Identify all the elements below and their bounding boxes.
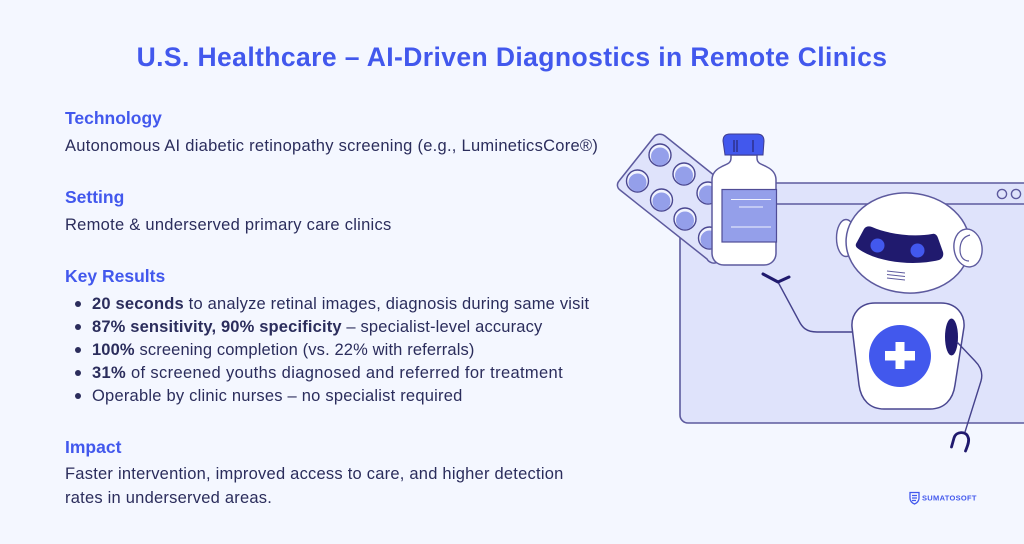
- list item 1: 20 seconds to analyze retinal images, diagnosis during same visit: [92, 295, 589, 313]
- robot left arm: [763, 274, 852, 332]
- right ear: [951, 227, 985, 269]
- list item 3: 100% screening completion (vs. 22% with referrals): [92, 341, 475, 359]
- left ear: [836, 220, 856, 256]
- list: key results: [75, 295, 589, 405]
- section heading: Key Results: Key Results: [65, 266, 165, 286]
- logo: Sumatosoft: SUMATOSOFT: [922, 494, 977, 502]
- robot body: [852, 303, 964, 409]
- text: technology description: Autonomous AI diabetic retinopathy screening (e.g., LumineticsCore®): [65, 137, 598, 155]
- logo: Sumatosoft: [910, 492, 977, 504]
- text: impact description: Faster intervention, improved access to care, and higher detection: [65, 465, 564, 483]
- text: setting description: Remote & underserved primary care clinics: [65, 216, 392, 234]
- icon: blister pack: [617, 134, 740, 263]
- section heading: Impact: Impact: [65, 437, 121, 457]
- visor: [856, 226, 943, 263]
- bottle cap: [723, 134, 764, 155]
- section heading: Setting: Setting: [65, 187, 124, 207]
- title: U.S. Healthcare – AI-Driven Diagnostics in Remote Clinics: [137, 42, 887, 72]
- text: impact description: [65, 465, 564, 507]
- list item 4: 31% of screened youths diagnosed and referred for treatment: [92, 364, 563, 382]
- browser window: [680, 183, 1024, 423]
- bottle label: [722, 190, 776, 242]
- icon: medicine bottle: [712, 134, 776, 265]
- list item 2: 87% sensitivity, 90% specificity – specialist-level accuracy: [92, 318, 542, 336]
- robot right arm: [952, 342, 982, 451]
- medical cross badge: [869, 325, 931, 387]
- section heading: Technology: Technology: [65, 108, 162, 128]
- robot head: [836, 189, 985, 297]
- text: impact description: rates in underserved areas.: [65, 489, 272, 507]
- list item 5: Operable by clinic nurses – no specialist required: [92, 387, 463, 405]
